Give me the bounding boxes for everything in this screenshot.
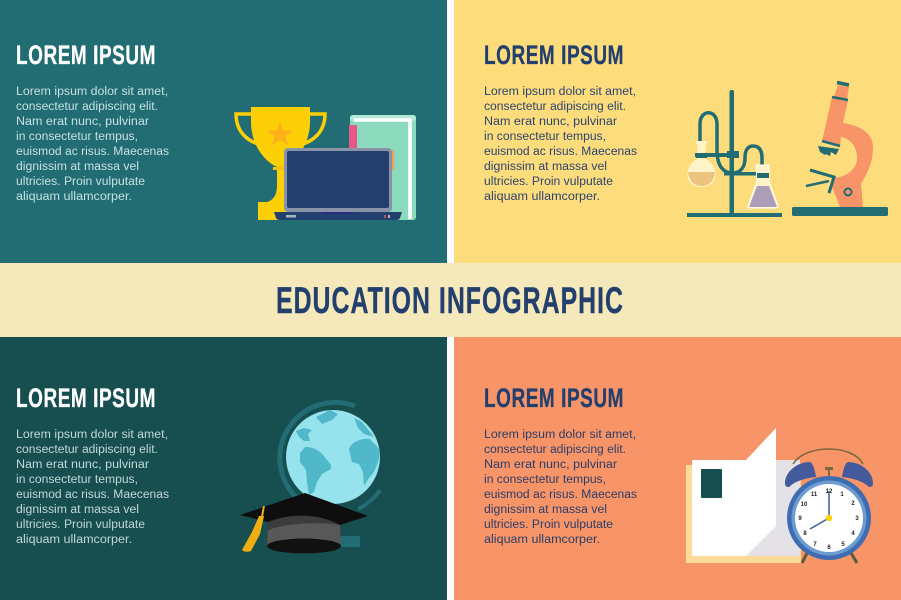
clock numerals: 10 <box>801 502 808 508</box>
icon: globe <box>280 402 380 547</box>
text block: bottom left: in consectetur tempus, <box>16 474 138 486</box>
clock numerals: 8 <box>803 531 807 537</box>
text block: bottom right: Lorem ipsum dolor sit amet, <box>484 429 636 441</box>
text block: top right: in consectetur tempus, <box>484 131 606 143</box>
clock numerals: 1 <box>840 492 844 498</box>
icon: graduation cap <box>240 493 368 554</box>
text block: top left: Nam erat nunc, pulvinar <box>16 116 149 128</box>
text block: top right: ultricies. Proin vulputate <box>484 176 613 188</box>
clock numerals: 7 <box>813 542 817 548</box>
clock numerals: 4 <box>851 531 855 537</box>
text block: top left: euismod ac risus. Maecenas <box>16 146 169 158</box>
text block: top left: aliquam ullamcorper. <box>16 191 132 203</box>
clock numerals: 9 <box>798 516 802 522</box>
text block: bottom right: ultricies. Proin vulputate <box>484 519 613 531</box>
clock numerals: 5 <box>841 542 845 548</box>
title: EDUCATION INFOGRAPHIC <box>276 280 624 321</box>
text block: top left <box>16 86 169 203</box>
text block: top right: euismod ac risus. Maecenas <box>484 146 637 158</box>
text block: top right: Nam erat nunc, pulvinar <box>484 116 617 128</box>
text block: top right: Lorem ipsum dolor sit amet, <box>484 86 636 98</box>
text block: bottom left <box>16 429 169 546</box>
text block: bottom left: Nam erat nunc, pulvinar <box>16 459 149 471</box>
text block: bottom right: consectetur adipiscing elit. <box>484 444 626 456</box>
text block: bottom left: aliquam ullamcorper. <box>16 534 132 546</box>
text block: top right: dignissim at massa vel <box>484 161 607 173</box>
icon: trophy <box>236 107 325 220</box>
text block: bottom right: dignissim at massa vel <box>484 504 607 516</box>
text block: top right <box>484 86 637 203</box>
icon: laptop <box>274 148 402 220</box>
text block: bottom right: in consectetur tempus, <box>484 474 606 486</box>
icon: alarm clock <box>785 449 873 563</box>
text block: bottom right: Nam erat nunc, pulvinar <box>484 459 617 471</box>
text block: bottom left: dignissim at massa vel <box>16 504 139 516</box>
text block: top left: dignissim at massa vel <box>16 161 139 173</box>
clock numerals: 12 <box>826 489 833 495</box>
text block: bottom left: ultricies. Proin vulputate <box>16 519 145 531</box>
text block: top right: consectetur adipiscing elit. <box>484 101 626 113</box>
text block: top right: aliquam ullamcorper. <box>484 191 600 203</box>
clock numerals: 6 <box>827 545 831 551</box>
heading: top left: LOREM IPSUM <box>16 40 156 70</box>
text block: bottom left: Lorem ipsum dolor sit amet, <box>16 429 168 441</box>
clock numerals: 11 <box>811 492 818 498</box>
clock numerals: 3 <box>855 516 859 522</box>
icon: microscope <box>792 82 888 216</box>
panel: lab equipment <box>454 0 901 263</box>
clock numerals <box>798 489 859 551</box>
icon: open book <box>686 428 801 563</box>
clock numerals: 2 <box>851 501 855 507</box>
text block: top left: ultricies. Proin vulputate <box>16 176 145 188</box>
icon: tassel <box>242 506 264 552</box>
text block: top left: Lorem ipsum dolor sit amet, <box>16 86 168 98</box>
text block: bottom right: euismod ac risus. Maecenas <box>484 489 637 501</box>
panel: title band <box>0 263 901 337</box>
panel: trophy and laptop <box>0 0 447 263</box>
text block: bottom right <box>484 429 637 546</box>
icon: lab stand with flasks <box>687 90 782 217</box>
heading: bottom right: LOREM IPSUM <box>484 383 624 413</box>
text block: bottom left: euismod ac risus. Maecenas <box>16 489 169 501</box>
icon: book <box>349 115 416 220</box>
panel: globe and cap <box>0 337 447 600</box>
panel: book and clock <box>454 337 901 600</box>
text block: top left: consectetur adipiscing elit. <box>16 101 158 113</box>
text block: top left: in consectetur tempus, <box>16 131 138 143</box>
text block: bottom right: aliquam ullamcorper. <box>484 534 600 546</box>
heading: top right: LOREM IPSUM <box>484 40 624 70</box>
text block: bottom left: consectetur adipiscing elit. <box>16 444 158 456</box>
heading: bottom left: LOREM IPSUM <box>16 383 156 413</box>
